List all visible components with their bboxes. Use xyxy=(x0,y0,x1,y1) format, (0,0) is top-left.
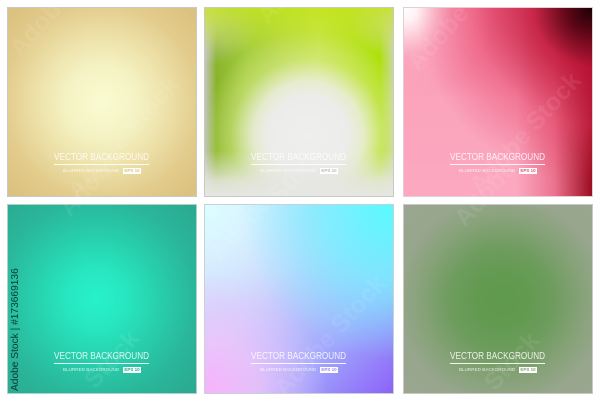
caption: violet panel: BLURRED BACKGROUND xyxy=(260,367,316,372)
watermark: Adobe Stock repeated: Adobe xyxy=(402,0,475,76)
caption: olive panel: VECTOR BACKGROUND xyxy=(450,351,545,362)
caption: beige panel xyxy=(54,152,149,174)
watermark: Adobe Stock repeated: Stock xyxy=(264,140,330,209)
watermark: Adobe Stock repeated: Adobe xyxy=(54,145,127,222)
caption: green panel: EPS 10 xyxy=(321,168,337,172)
panel: olive green blurred background xyxy=(403,204,593,394)
watermark: Adobe Stock repeated: Adobe Stock xyxy=(464,67,587,199)
watermark: Adobe Stock repeated: Adobe Stock xyxy=(269,270,392,401)
caption: teal panel xyxy=(54,351,149,373)
caption: pink panel: BLURRED BACKGROUND xyxy=(459,168,515,173)
caption: beige panel: VECTOR BACKGROUND xyxy=(54,152,149,163)
image id: vertical stock number: Adobe Stock | #173669136 xyxy=(10,268,21,391)
caption: olive panel: BLURRED BACKGROUND xyxy=(459,367,515,372)
caption: violet panel: EPS 10 xyxy=(321,366,337,372)
watermark: Adobe Stock repeated: Stock xyxy=(479,327,545,396)
caption: teal panel: VECTOR BACKGROUND xyxy=(54,351,149,362)
caption: teal panel: EPS 10 xyxy=(124,366,140,372)
caption: pink panel: EPS 10 xyxy=(520,168,536,172)
panel: pink and crimson blurred background xyxy=(403,7,593,197)
caption: green panel xyxy=(251,152,346,174)
panel: teal blurred background xyxy=(7,204,197,394)
caption: pink panel: VECTOR BACKGROUND xyxy=(450,152,545,163)
watermark: Adobe Stock repeated: Adobe Stock xyxy=(62,72,185,204)
caption: violet panel: VECTOR BACKGROUND xyxy=(251,351,346,362)
caption: green panel: BLURRED BACKGROUND xyxy=(260,168,316,173)
caption: green panel: VECTOR BACKGROUND xyxy=(251,152,346,163)
watermark: Adobe Stock repeated: Adobe xyxy=(449,155,522,232)
caption: pink panel xyxy=(450,152,545,174)
panel: cyan to violet blurred background xyxy=(204,204,394,394)
panel: beige blurred background xyxy=(7,7,197,197)
caption: beige panel: EPS 10 xyxy=(124,168,140,172)
caption: teal panel: BLURRED BACKGROUND xyxy=(63,367,119,372)
caption: olive panel: EPS 10 xyxy=(520,366,536,372)
watermark: Adobe Stock repeated: Stock xyxy=(79,325,145,394)
soft grey bottom and corner fade xyxy=(205,8,393,196)
caption: beige panel: BLURRED BACKGROUND xyxy=(63,168,119,173)
caption: olive panel xyxy=(450,351,545,373)
caption: violet panel xyxy=(251,351,346,373)
watermark: Adobe Stock repeated: Adobe xyxy=(204,189,277,266)
panel: lime green blurred background xyxy=(204,7,394,197)
